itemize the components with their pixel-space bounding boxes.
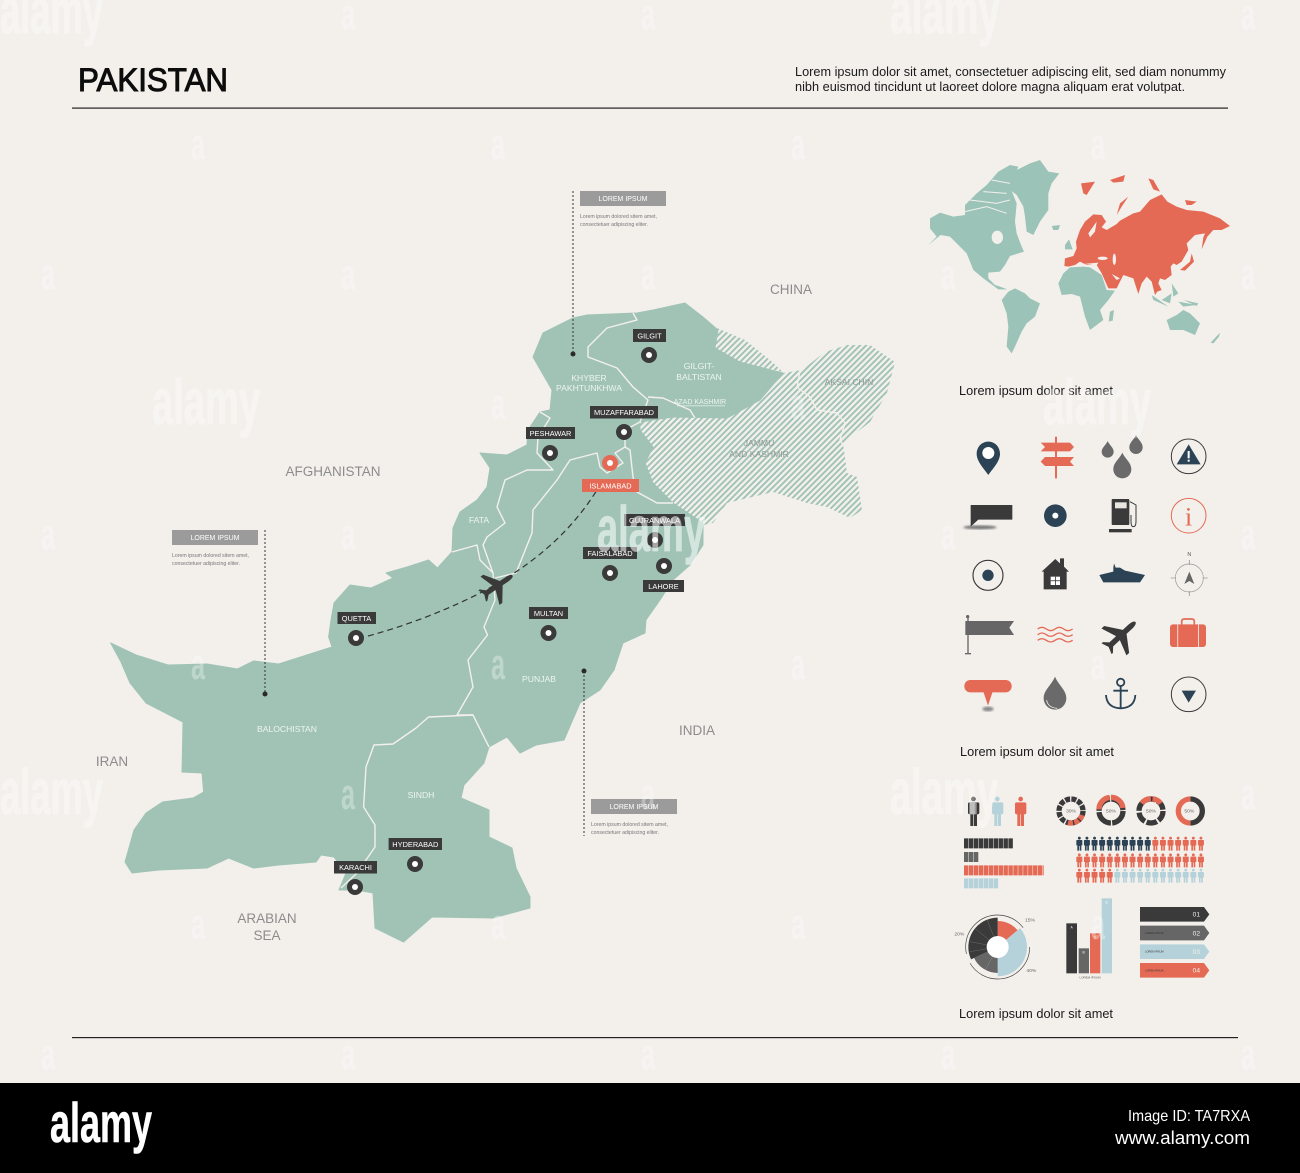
callout: bottom: Lorem ipsum dolored sitem amet, <box>591 822 668 828</box>
bar chart: LOREM IPSUM <box>1080 976 1101 980</box>
city: Multan: MULTAN <box>534 609 563 618</box>
callout: left: Lorem ipsum dolored sitem amet, <box>172 553 249 559</box>
region labels: AND KASHMIR <box>729 449 789 459</box>
callout: left: consectetuer adipiscing eliter. <box>172 561 240 567</box>
city: Gujranwala: GUJRANWALA <box>629 516 680 525</box>
region labels: PAKHTUNKHWA <box>556 383 622 393</box>
pie chart: 20% <box>954 932 965 938</box>
icon: compass <box>1171 552 1208 596</box>
icon: target <box>973 560 1003 590</box>
icon: drop <box>1044 677 1066 710</box>
region labels: FATA <box>469 515 489 525</box>
city: Hyderabad: HYDERABAD <box>392 840 438 849</box>
title: PAKISTAN <box>78 62 228 98</box>
small watermarks: a <box>1091 900 1105 949</box>
numbered arrow tags: 03 <box>1193 949 1200 956</box>
intro text <box>795 65 1227 94</box>
small watermarks: a <box>1241 770 1255 819</box>
large watermarks: alamy <box>152 366 260 438</box>
large watermarks: alamy <box>597 493 705 565</box>
numbered arrow tags: LOREM IPSUM <box>1145 968 1164 972</box>
large watermarks: alamy <box>0 756 103 828</box>
icon: fuel pump <box>1109 499 1136 532</box>
heading: world: Lorem ipsum dolor sit amet <box>959 384 1114 398</box>
city: Lahore: LAHORE <box>648 582 679 591</box>
region labels: KHYBER <box>571 373 607 383</box>
small watermarks: a <box>791 380 805 429</box>
numbered arrow tags: LOREM IPSUM <box>1145 950 1164 954</box>
callout: bottom <box>582 668 677 836</box>
donut: 30% <box>1056 796 1086 826</box>
country shape <box>111 303 783 942</box>
pie chart <box>954 915 1037 979</box>
heading: icons: Lorem ipsum dolor sit amet <box>960 745 1115 759</box>
icon: warning <box>1171 439 1206 474</box>
donut: 50% one <box>1099 797 1123 823</box>
red Eurasia <box>1064 175 1230 295</box>
bottom bar: alamy <box>50 1091 152 1154</box>
callout: bottom: consectetuer adipiscing eliter. <box>591 830 659 836</box>
small watermarks: a <box>1241 510 1255 559</box>
small watermarks: a <box>41 250 55 299</box>
icon: plane <box>1094 609 1148 662</box>
icon: suitcase <box>1170 619 1206 647</box>
donut: 50% three <box>1178 799 1202 823</box>
green continents <box>928 160 1220 353</box>
small watermarks: a <box>641 770 655 819</box>
province borders <box>341 313 848 888</box>
region labels: AKSAI CHIN <box>825 377 873 387</box>
disputed area hatching <box>640 328 895 525</box>
small watermarks: a <box>941 250 955 299</box>
city markers <box>334 329 685 895</box>
small watermarks: a <box>791 120 805 169</box>
neighbouring country labels: IRAN <box>96 754 128 769</box>
city: Gilgit <box>633 329 666 363</box>
numbered arrow tags: 02 <box>1193 930 1200 937</box>
bar chart: C <box>1094 936 1097 940</box>
icon: banner flag <box>965 615 1014 654</box>
icon: waves <box>1038 627 1073 642</box>
inland seas <box>992 222 1120 280</box>
numbered arrow tags: LOREM IPSUM <box>1145 931 1164 935</box>
callout: top: Lorem ipsum dolored sitem amet, <box>580 214 657 220</box>
neighbouring country labels: CHINA <box>770 282 812 297</box>
pie chart: 40% <box>1026 968 1037 974</box>
icon: down arrow <box>1171 677 1206 712</box>
icon: info: i <box>1185 503 1192 532</box>
region labels: GILGIT- <box>684 361 714 371</box>
small watermarks: a <box>641 1030 655 1079</box>
numbered arrow tags: 04 <box>1193 968 1200 975</box>
city: Karachi <box>334 861 377 895</box>
bottom bar: www.alamy.com <box>1114 1128 1250 1148</box>
intro text: Lorem ipsum dolor sit amet, consectetuer adipiscing elit, sed diam nonummy <box>795 65 1227 79</box>
donut: 30%: 30% <box>1066 809 1077 815</box>
icon: signpost <box>1041 437 1074 478</box>
small watermarks: a <box>491 120 505 169</box>
icon: info <box>1171 498 1206 533</box>
icon: ship <box>1099 563 1145 582</box>
city: Quetta: QUETTA <box>342 614 371 623</box>
neighbouring country labels <box>96 282 812 943</box>
icon: three drops <box>1102 435 1143 478</box>
arctic island gaps <box>965 180 1010 213</box>
flight route with plane <box>368 490 597 636</box>
numbered arrow tags <box>1140 907 1209 978</box>
region labels: BALOCHISTAN <box>257 724 317 734</box>
small watermarks: a <box>191 640 205 689</box>
small watermarks: a <box>791 900 805 949</box>
city: Quetta <box>338 612 376 646</box>
large watermarks <box>0 0 1151 828</box>
donut: 50% two: 50% <box>1146 809 1157 815</box>
bar chart: A <box>1071 926 1074 930</box>
bar chart: B <box>1083 951 1086 955</box>
people icons <box>968 797 1026 826</box>
small watermarks: a <box>941 1030 955 1079</box>
bar chart: D <box>1105 901 1108 905</box>
small watermarks: a <box>641 250 655 299</box>
bottom bar: Image ID: TA7RXA <box>1128 1108 1250 1125</box>
small watermarks: a <box>791 640 805 689</box>
neighbouring country labels: ARABIAN <box>237 911 297 926</box>
donut: 50% two <box>1139 799 1163 823</box>
people grid <box>1076 837 1204 883</box>
small watermarks: a <box>1241 1030 1255 1079</box>
bottom bar <box>0 1083 1300 1173</box>
city: Islamabad capital <box>582 455 639 492</box>
callout: top: LOREM IPSUM <box>598 196 648 203</box>
region labels: JAMMU <box>744 438 774 448</box>
large watermarks: alamy <box>890 756 998 828</box>
small watermarks: a <box>1091 640 1105 689</box>
callout: top: consectetuer adipiscing eliter. <box>580 222 648 228</box>
world map <box>928 160 1230 353</box>
callout: bottom: LOREM IPSUM <box>609 804 659 811</box>
callout: left: LOREM IPSUM <box>190 535 240 542</box>
icon: red map marker <box>964 680 1012 711</box>
neighbouring country labels: INDIA <box>679 723 715 738</box>
neighbouring country labels: SEA <box>253 928 281 943</box>
city: Karachi: KARACHI <box>339 863 372 872</box>
small watermarks: a <box>341 510 355 559</box>
callout: top <box>570 191 666 356</box>
map of Pakistan <box>111 303 895 942</box>
region labels <box>257 361 873 800</box>
region labels: BALTISTAN <box>676 372 722 382</box>
intro text: nibh euismod tincidunt ut laoreet dolore magna aliquam erat volutpat. <box>795 80 1185 94</box>
segmented bars <box>964 843 1044 883</box>
small watermarks: a <box>341 770 355 819</box>
small watermarks: a <box>191 900 205 949</box>
small watermarks: a <box>491 640 505 689</box>
donut: 50% three: 50% <box>1184 809 1195 815</box>
city: Peshawar: PESHAWAR <box>530 429 571 438</box>
region labels: PUNJAB <box>522 674 556 684</box>
city: Islamabad capital: ISLAMABAD <box>589 482 632 490</box>
numbered arrow tags: 01 <box>1193 912 1200 919</box>
icon: compass: N <box>1187 552 1191 558</box>
city: Muzaffarabad: MUZAFFARABAD <box>594 408 654 417</box>
small watermarks: a <box>1241 250 1255 299</box>
pie chart: 15% <box>1025 917 1036 923</box>
city: Hyderabad <box>389 838 442 872</box>
small watermarks: a <box>41 1030 55 1079</box>
infographic elements <box>954 796 1209 980</box>
small watermarks: a <box>1091 120 1105 169</box>
icon set <box>963 435 1208 712</box>
small watermarks: a <box>341 1030 355 1079</box>
city: Gujranwala <box>624 514 685 548</box>
city: Gilgit: GILGIT <box>637 332 662 340</box>
city: Faisalabad <box>583 547 637 581</box>
city: Lahore <box>643 558 684 592</box>
callout: left <box>172 530 268 696</box>
small watermarks: a <box>491 900 505 949</box>
city: Faisalabad: FAISALABAD <box>587 549 633 558</box>
small watermarks: a <box>41 510 55 559</box>
small watermarks: a <box>491 380 505 429</box>
city: Multan <box>529 607 568 641</box>
region labels: AZAD KASHMIR <box>674 399 726 406</box>
icon: disc <box>1044 504 1067 527</box>
icon: map pin <box>977 442 1000 475</box>
neighbouring country labels: AFGHANISTAN <box>285 464 381 479</box>
heading: charts: Lorem ipsum dolor sit amet <box>959 1007 1114 1021</box>
icon: anchor <box>1106 679 1135 708</box>
icon: house <box>1042 558 1069 589</box>
small watermarks: a <box>941 510 955 559</box>
large watermarks: alamy <box>1043 366 1151 438</box>
icon: speech flag <box>963 505 1012 529</box>
bar chart <box>1066 898 1112 980</box>
small watermarks: a <box>191 120 205 169</box>
region labels: SINDH <box>408 790 434 800</box>
small watermarks: a <box>341 250 355 299</box>
city: Muzaffarabad <box>590 406 658 440</box>
city: Peshawar <box>526 427 575 461</box>
donut: 50% one: 50% <box>1106 809 1117 815</box>
